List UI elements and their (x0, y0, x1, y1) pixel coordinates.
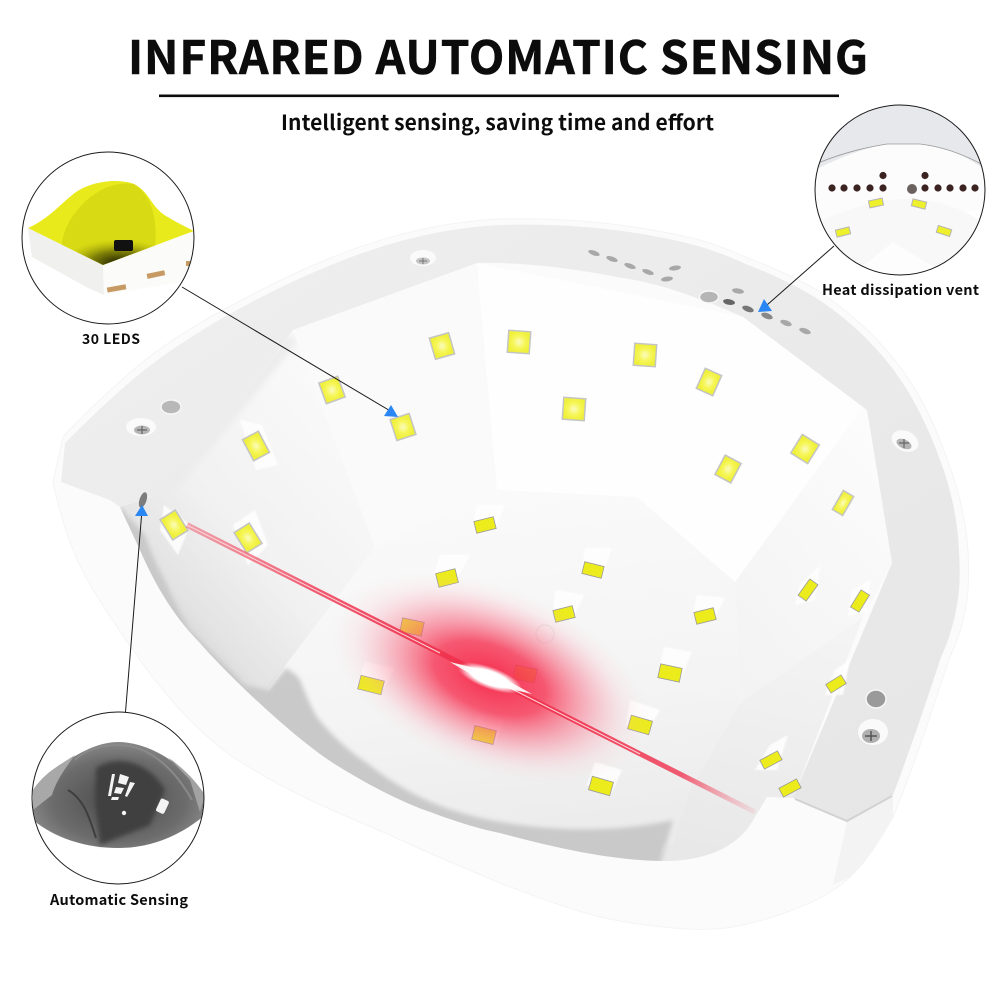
power button top (700, 291, 718, 303)
front band right shaded section (833, 795, 893, 885)
chip (114, 240, 133, 251)
left facet (120, 452, 338, 690)
callout: heat vent lens (814, 104, 986, 276)
title: INFRARED AUTOMATIC SENSING (128, 22, 868, 88)
lower right facet (660, 649, 848, 861)
LED body left face (28, 228, 104, 295)
label: automatic sensing: Automatic Sensing (49, 889, 188, 910)
LED beads: floor (358, 517, 870, 797)
vent holes (588, 249, 812, 335)
back centre facet (477, 263, 682, 497)
reflection highlights (108, 774, 169, 815)
right facet (735, 407, 893, 703)
yellow dome (28, 181, 194, 265)
label: 30 LEDS: 30 LEDS (82, 329, 140, 349)
arrow: vent callout (758, 246, 834, 312)
arrow: LED callout (182, 287, 398, 417)
back right facet (477, 263, 863, 582)
red infrared beam (187, 525, 755, 812)
lower cavity (815, 199, 985, 290)
label: heat dissipation vent: Heat dissipation vent (822, 279, 979, 300)
callout: automatic sensing lens (32, 712, 205, 884)
subtitle: Intelligent sensing, saving time and effort (281, 107, 714, 137)
lamp interior (100, 250, 920, 875)
mini LEDs (835, 198, 952, 237)
back left facet (293, 263, 497, 547)
top rim (61, 225, 960, 822)
red infrared glow (300, 530, 680, 826)
interior crescent shadow (100, 507, 673, 875)
title underline (159, 94, 839, 97)
arrow: sensor callout (126, 505, 148, 712)
vent dots (828, 172, 979, 192)
left facet soft top edge (222, 338, 294, 424)
beam white core flare (450, 656, 532, 700)
screws and buttons (126, 250, 922, 745)
contacts (107, 284, 126, 293)
lower right rim shadow edge (795, 796, 892, 821)
LED beads: upper wall (160, 330, 854, 553)
lamp body white front band (53, 219, 969, 929)
callout: 30 LEDS lens (20, 152, 200, 324)
LED body right face (103, 231, 196, 295)
nail lamp (53, 219, 969, 929)
floor (341, 693, 740, 840)
sensor hole (137, 491, 149, 509)
LED beads: reflector notches (160, 420, 870, 796)
